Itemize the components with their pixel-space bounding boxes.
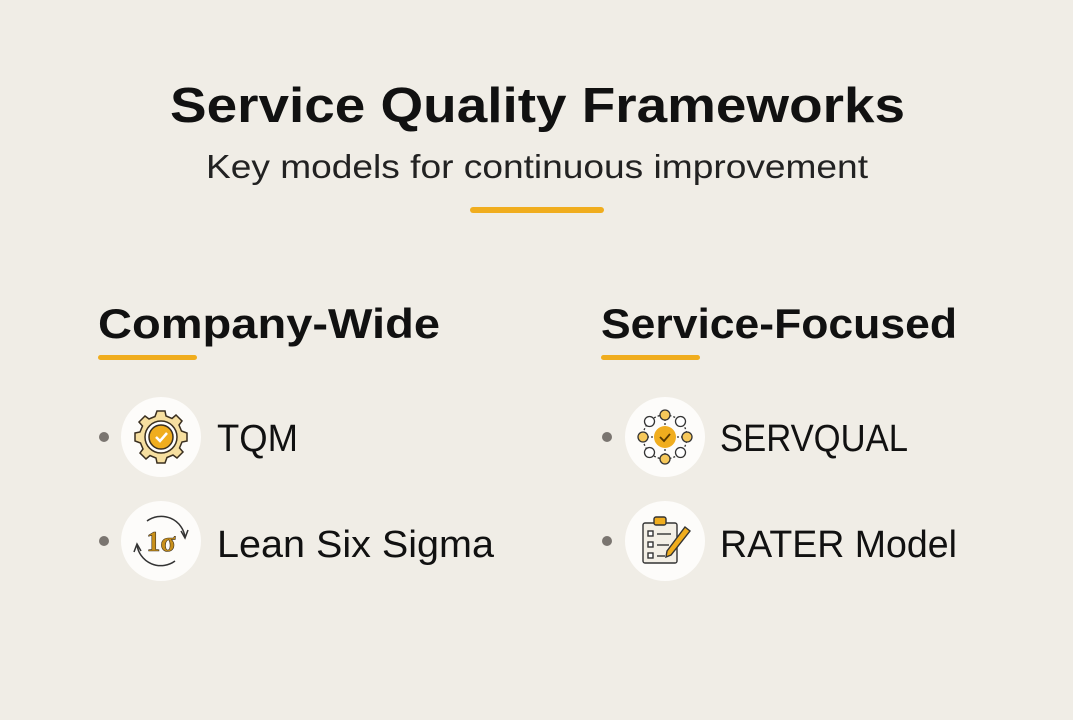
heading: Service-Focused: Service-Focused bbox=[601, 300, 957, 347]
icon: clipboard with pencil bbox=[643, 517, 690, 563]
icon: network with check bbox=[638, 410, 692, 464]
item: RATER Model bbox=[602, 501, 957, 581]
item: SERVQUAL bbox=[602, 397, 908, 477]
subtitle: Key models for continuous improvement bbox=[206, 148, 868, 185]
heading: Company-Wide: Company-Wide bbox=[98, 300, 440, 347]
icon: 1 sigma with cycle arrows: 1σ bbox=[146, 527, 176, 558]
icon: gear with check bbox=[135, 411, 187, 463]
item: RATER Model: RATER Model bbox=[720, 524, 957, 566]
icon: 1 sigma with cycle arrows bbox=[134, 516, 188, 566]
heading: Company-Wide bbox=[98, 300, 440, 360]
item: TQM bbox=[99, 397, 298, 477]
item: Lean Six Sigma: Lean Six Sigma bbox=[217, 524, 495, 566]
item: TQM: TQM bbox=[217, 418, 298, 460]
title underline accent bbox=[470, 207, 604, 213]
title: Service Quality Frameworks bbox=[170, 79, 905, 133]
item: Lean Six Sigma bbox=[99, 501, 495, 581]
item: SERVQUAL: SERVQUAL bbox=[720, 418, 908, 460]
